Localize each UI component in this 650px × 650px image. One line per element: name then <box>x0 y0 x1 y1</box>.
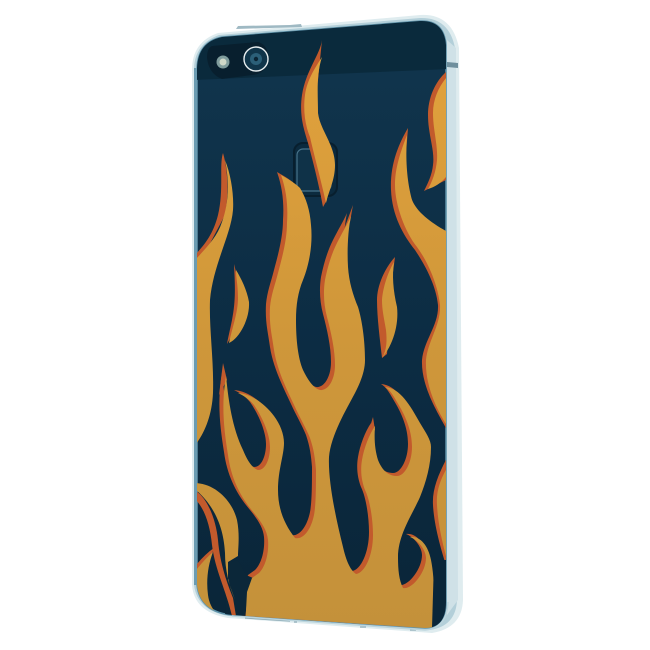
clipped artwork <box>195 15 448 630</box>
flame: large right <box>391 128 446 428</box>
camera module <box>207 42 268 79</box>
flame: far right lower <box>432 460 446 560</box>
flame: top centre <box>301 40 335 207</box>
phone back panel <box>197 21 446 628</box>
inner bottom edge highlight <box>232 602 448 630</box>
flame tip wedges <box>219 205 375 440</box>
flame: bottom left small <box>197 549 214 610</box>
flame: top right <box>424 72 446 191</box>
bottom right dark corner <box>432 560 446 628</box>
flame: left edge <box>196 153 233 444</box>
left edge highlight <box>194 68 197 585</box>
clear case outer shell <box>192 15 463 633</box>
flame: bottom left arc <box>196 483 239 616</box>
phone case illustration <box>192 15 463 633</box>
flame: small mid right <box>377 257 397 358</box>
lens <box>244 47 268 71</box>
main flame body <box>219 172 434 630</box>
fingerprint sensor <box>294 143 337 196</box>
flash <box>216 56 230 68</box>
flame: small mid left <box>227 264 249 344</box>
upper dark band <box>197 21 446 80</box>
